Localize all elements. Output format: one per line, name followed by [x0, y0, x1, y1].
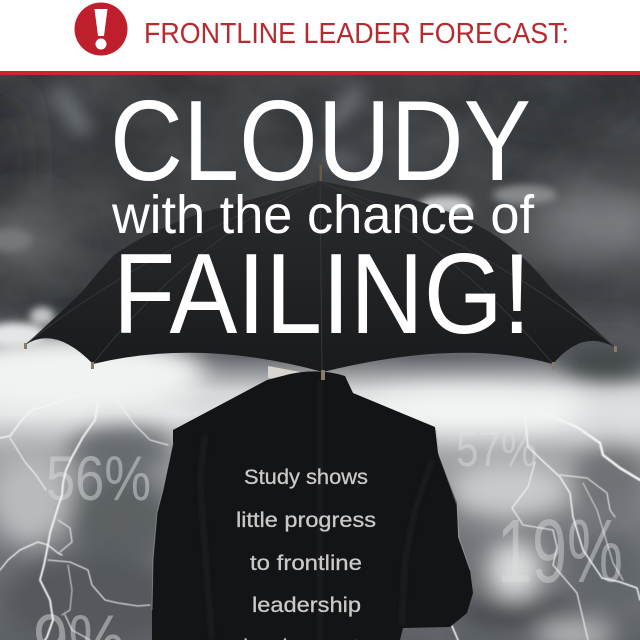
header title: FRONTLINE LEADER FORECAST:	[144, 18, 569, 50]
red divider line	[0, 71, 640, 75]
canopy	[25, 181, 616, 372]
stat: 57%: 57%	[456, 421, 537, 477]
study summary text: little progress	[236, 508, 376, 532]
study summary text: Study shows	[244, 465, 368, 489]
shirt collar	[268, 366, 300, 380]
umbrella tips	[24, 343, 617, 380]
lightning: right bolts	[452, 408, 640, 640]
jacket edge highlight	[152, 430, 470, 610]
study summary text: leadership	[252, 593, 361, 617]
icon: red exclamation circle	[74, 2, 128, 56]
title line: CLOUDY: CLOUDY	[110, 78, 531, 205]
study summary text	[236, 465, 376, 640]
cloud texture	[0, 75, 640, 356]
title line: FAILING!: FAILING!	[113, 231, 531, 358]
main title	[110, 78, 535, 358]
title line: with the chance of: with the chance of	[111, 185, 535, 245]
study summary text: to frontline	[250, 551, 362, 575]
canopy ribs	[25, 182, 616, 372]
man in black suit	[152, 366, 473, 640]
umbrella	[24, 165, 617, 380]
stat: 56%: 56%	[46, 444, 151, 514]
lightning: left bolts	[0, 395, 168, 640]
ferrule	[320, 165, 322, 182]
header band	[0, 0, 640, 71]
sleeve shading	[200, 380, 432, 640]
suit jacket	[152, 371, 473, 640]
